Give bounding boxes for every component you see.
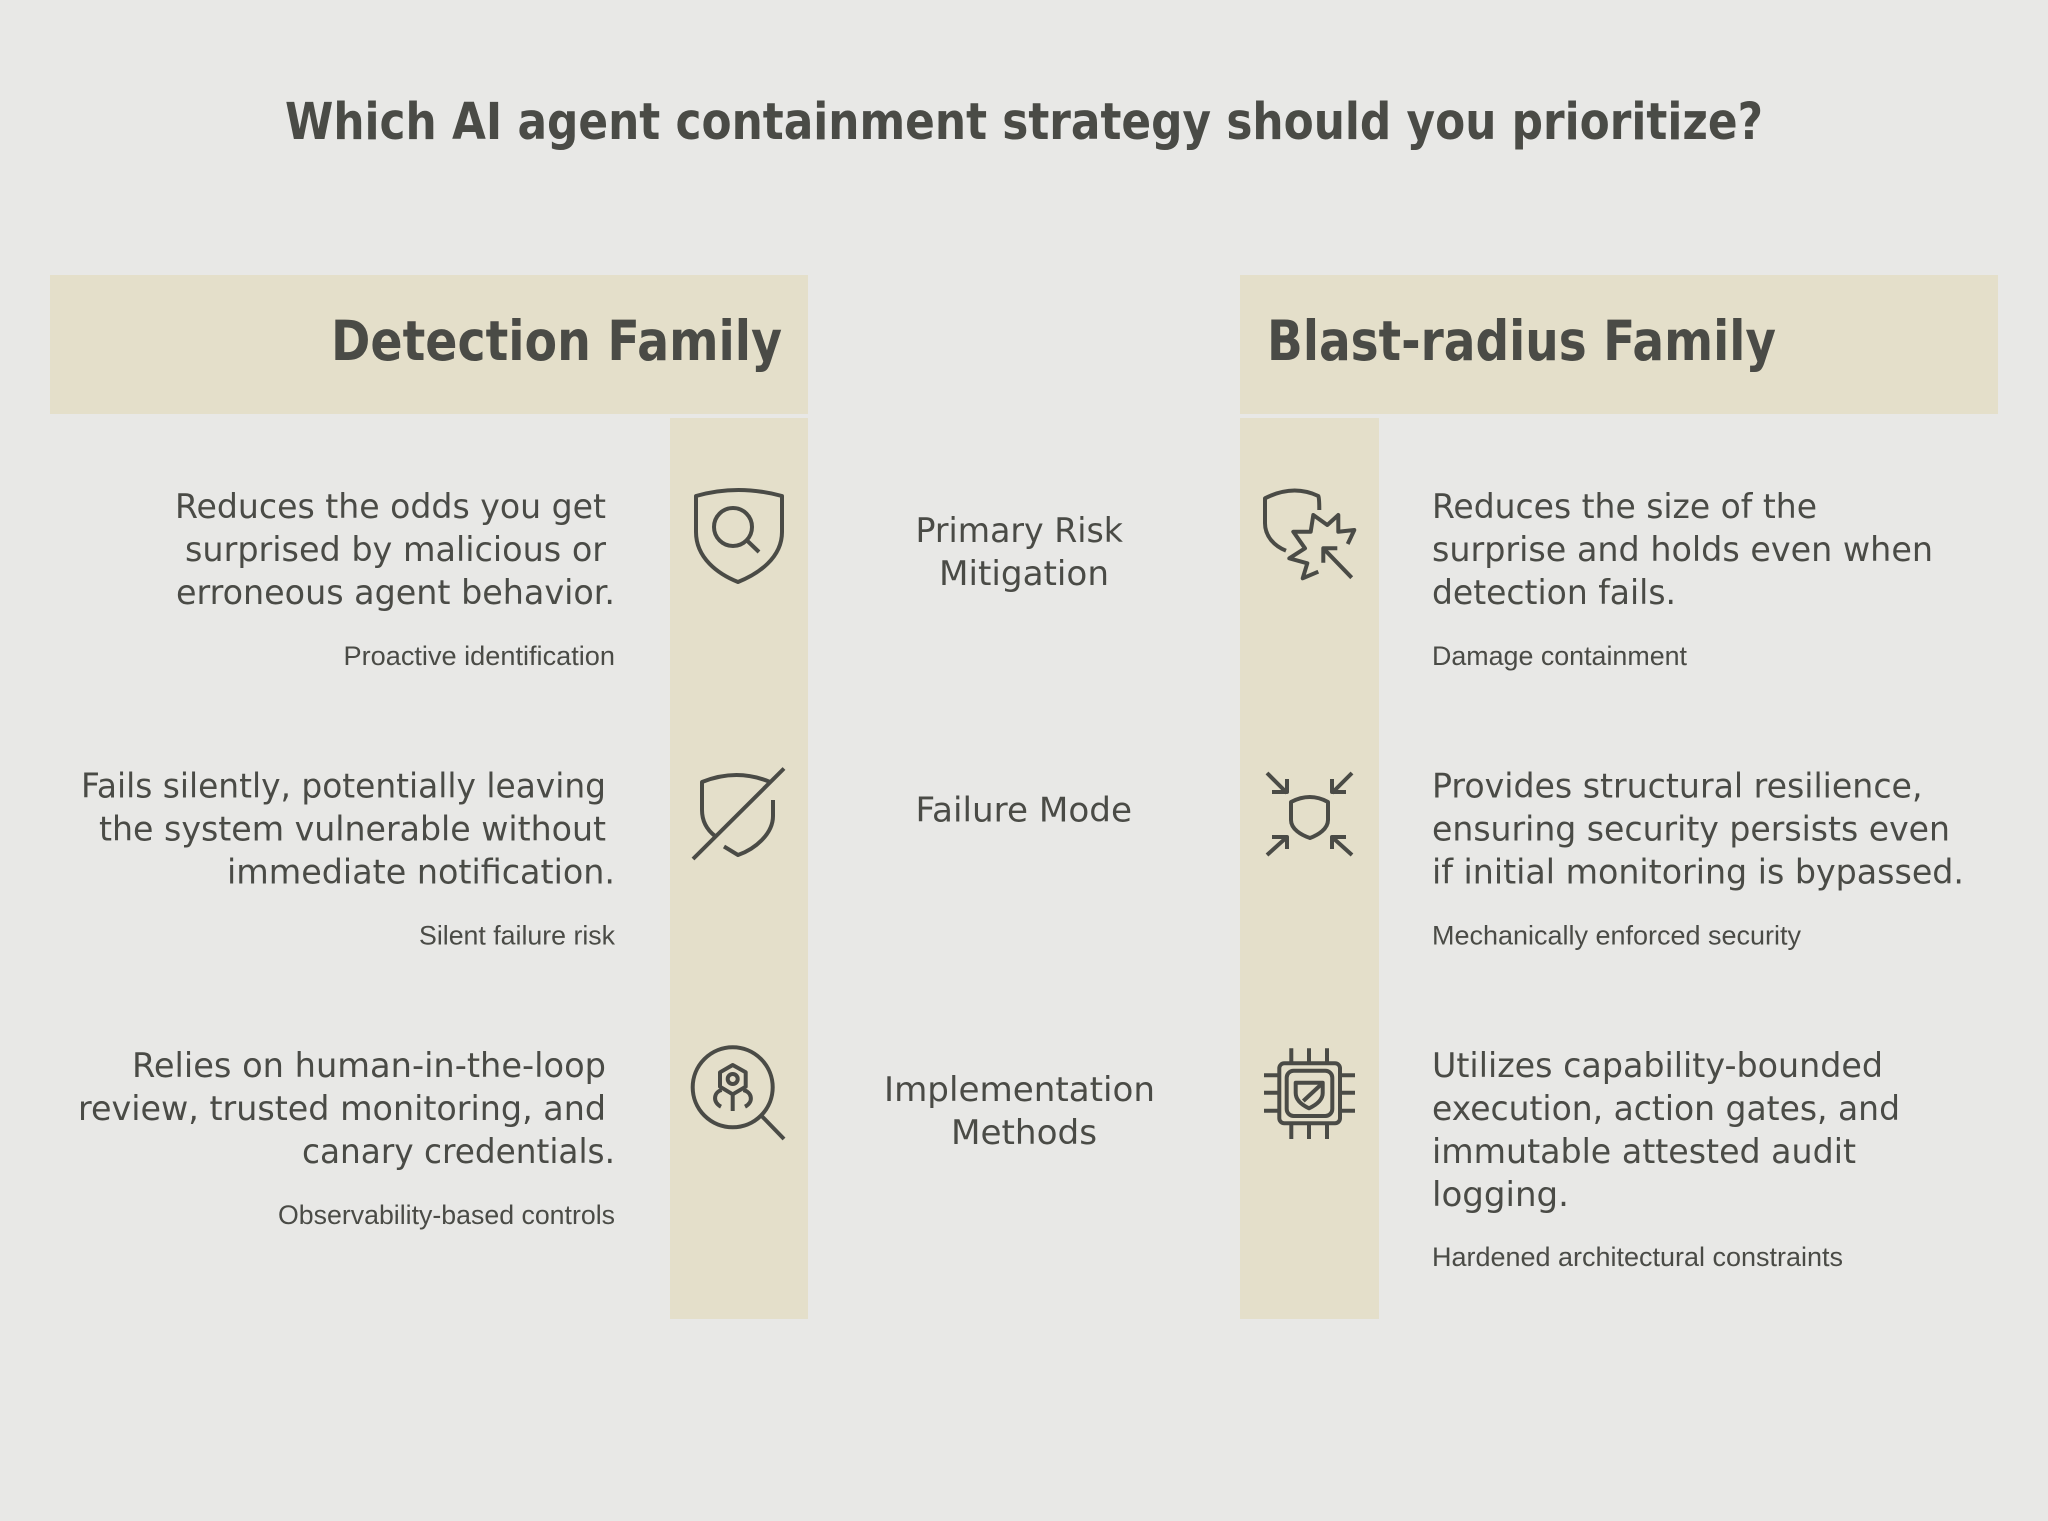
panel: detection family header — [50, 275, 808, 414]
text block: blast-radius implementation — [1432, 1046, 1900, 1272]
text block: blast-radius failure mode: ensuring security persists even — [1432, 810, 1950, 850]
text block: detection implementation: Relies on human-in-the-loop — [132, 1046, 606, 1086]
heading: blast-radius family: Blast-radius Family — [1267, 309, 1776, 373]
text block: detection primary risk: Proactive identification — [344, 641, 615, 671]
panel: blast-radius icon column — [1240, 418, 1379, 1319]
icon: magnifier over robot claw — [693, 1047, 784, 1139]
label: implementation methods: Implementation — [884, 1070, 1155, 1110]
title: Which AI agent containment strategy should you prioritize? — [285, 93, 1763, 152]
label: implementation methods: Methods — [951, 1113, 1097, 1153]
icon: shield with magnifier — [696, 490, 782, 582]
text block: detection implementation: Observability-based controls — [278, 1200, 615, 1230]
text block: blast-radius failure mode — [1432, 766, 1964, 950]
text block: blast-radius implementation: immutable attested audit — [1432, 1132, 1856, 1172]
text block: blast-radius primary risk: surprise and holds even when — [1432, 530, 1933, 570]
text block: detection failure mode: the system vulnerable without — [99, 810, 606, 850]
icon: shield with slash — [693, 768, 784, 859]
label: primary risk mitigation: Primary Risk — [916, 511, 1123, 551]
text block: detection implementation: review, trusted monitoring, and — [78, 1089, 606, 1129]
text block: detection failure mode: immediate notification. — [227, 852, 615, 892]
text block: detection failure mode — [81, 766, 616, 950]
text block: detection primary risk: Reduces the odds you get — [175, 487, 606, 527]
text block: detection primary risk: erroneous agent behavior. — [176, 573, 615, 613]
text block: blast-radius failure mode: Mechanically enforced security — [1432, 920, 1802, 950]
text block: detection implementation: canary credentials. — [302, 1132, 615, 1172]
text block: detection primary risk — [175, 487, 615, 671]
label: primary risk mitigation: Mitigation — [939, 554, 1109, 594]
text block: blast-radius implementation: execution, action gates, and — [1432, 1089, 1900, 1129]
text block: detection failure mode: Silent failure risk — [419, 920, 616, 950]
heading: detection family: Detection Family — [331, 309, 782, 373]
text block: blast-radius implementation: logging. — [1432, 1175, 1569, 1215]
icon: chip with shield — [1264, 1048, 1355, 1139]
text block: blast-radius implementation: Hardened architectural constraints — [1432, 1242, 1843, 1272]
label: failure mode: Failure Mode — [916, 790, 1132, 830]
icon: shield with burst and arrow — [1265, 491, 1354, 578]
text block: detection failure mode: Fails silently, potentially leaving — [81, 766, 606, 806]
text block: blast-radius failure mode: if initial monitoring is bypassed. — [1432, 852, 1964, 892]
text block: blast-radius implementation: Utilizes capability-bounded — [1432, 1046, 1883, 1086]
text block: blast-radius primary risk: detection fails. — [1432, 573, 1676, 613]
icon: shield with inward arrows — [1267, 773, 1352, 855]
text block: blast-radius primary risk: Damage containment — [1432, 641, 1688, 671]
label: primary risk mitigation — [916, 511, 1123, 594]
text block: detection implementation — [78, 1046, 615, 1230]
text block: blast-radius failure mode: Provides structural resilience, — [1432, 766, 1922, 806]
text block: blast-radius primary risk — [1432, 487, 1933, 671]
text block: blast-radius primary risk: Reduces the size of the — [1432, 487, 1817, 527]
panel: blast-radius family header — [1240, 275, 1998, 414]
label: implementation methods — [884, 1070, 1155, 1153]
panel: detection icon column — [670, 418, 808, 1319]
text block: detection primary risk: surprised by malicious or — [185, 530, 606, 570]
